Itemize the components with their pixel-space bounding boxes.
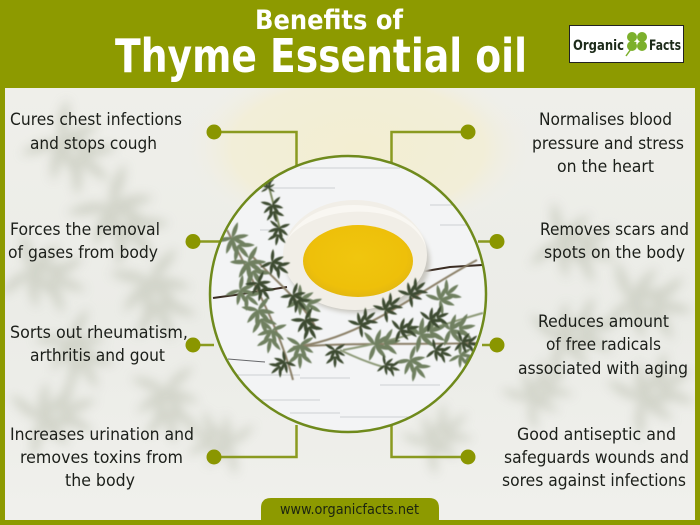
footer tab with url: www.organicfacts.net <box>280 502 419 518</box>
benefit: blood pressure <box>532 110 684 176</box>
bowl <box>284 236 433 315</box>
faded thyme background <box>0 94 700 479</box>
benefit: removal of gases: Forces the removal <box>10 220 160 239</box>
logo: Facts <box>649 38 681 54</box>
oil <box>303 225 413 297</box>
benefit: antiseptic <box>502 425 689 490</box>
benefit: chest infections <box>10 110 182 153</box>
central photo: thyme and oil bowl <box>210 156 486 432</box>
title <box>115 5 527 83</box>
benefit: rheumatism <box>10 323 188 365</box>
dark leaf layer <box>244 176 482 382</box>
wood cracks <box>230 168 480 417</box>
benefit: scars <box>540 220 689 262</box>
benefit: chest infections: Cures chest infections <box>10 110 182 129</box>
benefit: removal of gases: of gases from body <box>8 243 158 262</box>
benefit: blood pressure: pressure and stress <box>532 134 684 153</box>
benefit: scars: spots on the body <box>544 243 685 262</box>
thyme sprigs <box>213 176 483 388</box>
benefit: antiseptic: safeguards wounds and <box>504 448 689 467</box>
benefit: urination <box>10 425 194 490</box>
benefit: free radicals <box>518 312 688 378</box>
benefit: urination: the body <box>65 471 135 490</box>
benefit: blood pressure: Normalises blood <box>539 110 672 129</box>
connector lines <box>193 132 497 457</box>
benefit: antiseptic: Good antiseptic and <box>517 425 676 444</box>
benefit: rheumatism: Sorts out rheumatism, <box>10 323 188 342</box>
benefit: urination: Increases urination and <box>10 425 194 444</box>
benefit: removal of gases <box>8 220 160 262</box>
benefit: urination: removes toxins from <box>20 448 183 467</box>
light leaf layer <box>222 222 476 382</box>
benefit: free radicals: associated with aging <box>518 359 688 378</box>
title: Thyme Essential oil <box>115 29 527 83</box>
benefit: chest infections: and stops cough <box>30 134 157 153</box>
benefit: free radicals: of free radicals <box>546 335 661 354</box>
connector dots <box>186 124 504 464</box>
benefit: rheumatism: arthritis and gout <box>30 346 165 365</box>
footer tab with url <box>261 498 439 521</box>
title: Benefits of <box>255 5 403 36</box>
benefit: blood pressure: on the heart <box>557 157 655 176</box>
benefit: free radicals: Reduces amount <box>538 312 669 331</box>
logo: Organic <box>573 38 624 54</box>
benefit: antiseptic: sores against infections <box>502 471 686 490</box>
benefit: scars: Removes scars and <box>540 220 689 239</box>
logo <box>570 26 684 62</box>
